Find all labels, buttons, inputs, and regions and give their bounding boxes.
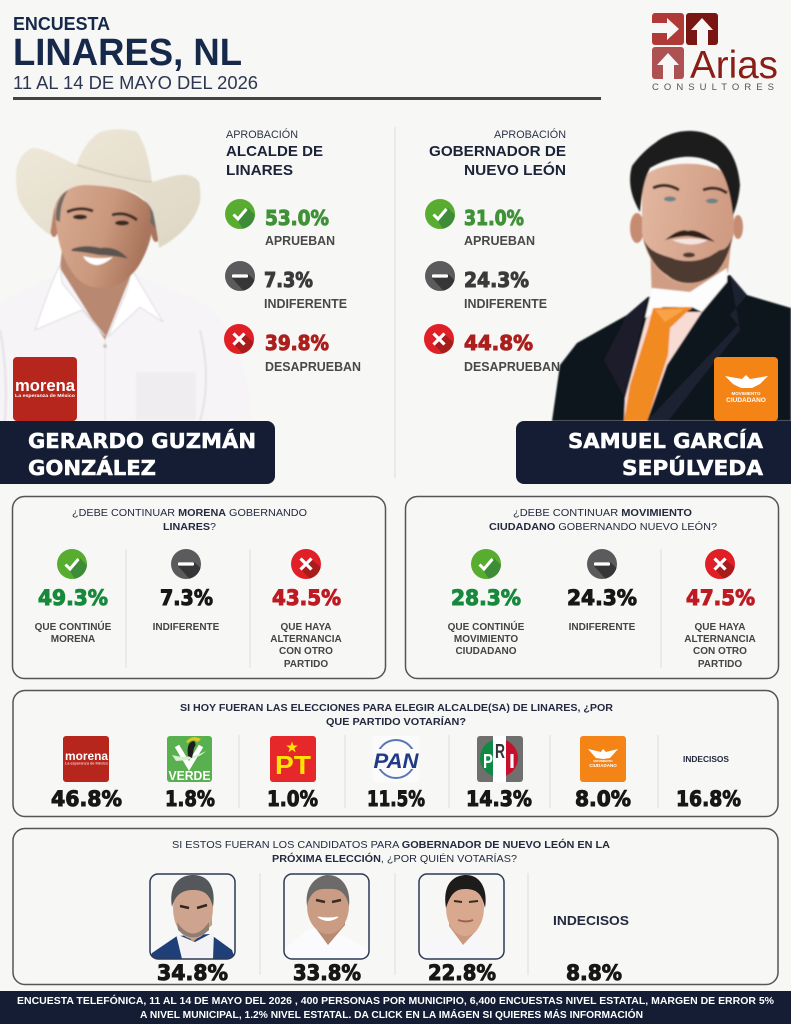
party: Verde [165,736,215,811]
panel: continuar Movimiento Ciudadano: ¿DEBE CONTINUAR MOVIMIENTO [513,507,692,519]
panel: continuar Morena: QUE HAYA [281,622,331,633]
panel: continuar Movimiento Ciudadano: 24.3% [567,586,637,610]
panel: continuar Morena: 7.3% [160,586,213,610]
party: morena: morena [65,749,108,763]
panel: continuar Movimiento Ciudadano: ALTERNANCIA [684,634,756,645]
party: PRI [466,736,532,811]
party: PRI: I [509,751,515,773]
candidate 3 [419,874,504,985]
party: PT [267,736,318,811]
panel: continuar Movimiento Ciudadano: CIUDADANO [455,646,517,657]
panel: continuar Movimiento Ciudadano: CON OTRO [693,646,747,657]
candidate 2: 33.8% [293,961,361,985]
panel: continuar Morena: MORENA [51,634,95,645]
logo: Movimiento Ciudadano: MOVIMIENTO [732,391,761,396]
panel: continuar Morena: 43.5% [272,586,341,610]
panel: continuar Movimiento Ciudadano: PARTIDO [698,659,742,670]
approval: gobernador de Nuevo León [424,128,566,374]
panel: candidatos gobernador: PRÓXIMA ELECCIÓN , ¿POR QUIÉN VOTARÍAS? [272,852,517,865]
panel: continuar Movimiento Ciudadano: MOVIMIENTO [454,634,518,645]
party: morena: 46.8% [51,787,122,811]
indecisos: INDECISOS [553,913,629,928]
panel: continuar Morena: 49.3% [38,586,108,610]
logo: morena: La esperanza de México [15,393,75,398]
candidate 2 [284,874,369,985]
panel: candidatos gobernador: SI ESTOS FUERAN LOS CANDIDATOS PARA GOBERNADOR DE NUEVO LEÓN EN LA [172,838,610,851]
panel: continuar Movimiento Ciudadano: QUE CONTINÚE [448,620,525,633]
indecisos: 8.8% [566,961,622,985]
panel: continuar Morena: ALTERNANCIA [270,634,342,645]
party: Movimiento Ciudadano [575,736,631,811]
party: PRI: R [495,741,505,763]
approval: alcalde de Linares: 53.0% [265,206,329,230]
approval: gobernador de Nuevo León: 31.0% [464,206,524,230]
portrait: Gerardo Guzmán González [0,129,251,421]
name bar: Gerardo: GERARDO GUZMÁN [28,429,256,453]
approval: gobernador de Nuevo León: NUEVO LEÓN [464,161,566,179]
approval: alcalde de Linares: APROBACIÓN [226,128,298,141]
title block: ENCUESTA [13,14,110,34]
candidate 1 [150,874,235,985]
party: PAN [367,736,425,811]
name bar: Samuel: SEPÚLVEDA [622,456,764,480]
logo: Movimiento Ciudadano: CIUDADANO [726,397,766,404]
approval: alcalde de Linares: 39.8% [265,331,329,355]
panel: continuar Morena: QUE CONTINÚE [35,620,112,633]
name bar: Gerardo: GONZÁLEZ [28,456,156,480]
logo: morena [13,357,77,421]
party: Movimiento Ciudadano: 8.0% [575,787,631,811]
panel: continuar Movimiento Ciudadano: INDIFERENTE [569,622,636,633]
approval: alcalde de Linares: ALCALDE DE [226,143,323,160]
panel: continuar Morena: CON OTRO [279,646,333,657]
candidate 1: 34.8% [157,961,228,985]
panel: continuar Movimiento Ciudadano [406,496,778,678]
footer note: ENCUESTA TELEFÓNICA, 11 AL 14 DE MAYO DEL 2026 , 400 PERSONAS POR MUNICIPIO, 6,400 ENCUESTAS NIVEL ESTATAL, MARGEN DE ERROR 5% [17,994,774,1007]
name bar: Gerardo [0,421,275,484]
party: PT: 1.0% [267,787,318,811]
approval: gobernador de Nuevo León: INDIFERENTE [464,297,547,311]
approval: gobernador de Nuevo León: APRUEBAN [464,234,535,248]
name bar: Samuel [516,421,791,484]
panel: continuar Morena: ¿DEBE CONTINUAR MORENA GOBERNANDO [72,507,307,519]
indecisos: 16.8% [676,787,741,811]
party: PAN: 11.5% [367,787,425,811]
panel: continuar Morena: PARTIDO [284,659,328,670]
panel: elecciones alcalde: QUE PARTIDO VOTARÍAN? [326,715,466,728]
name bar: Samuel: SAMUEL GARCÍA [568,429,764,453]
indecisos [553,913,629,985]
portrait: Samuel García Sepúlveda [552,131,791,421]
approval: alcalde de Linares: DESAPRUEBAN [265,360,361,374]
party: Movimiento Ciudadano: MOVIMIENTO [593,759,613,763]
panel: continuar Morena: LINARES? [163,521,216,533]
approval: alcalde de Linares: LINARES [226,162,293,179]
panel: continuar Morena: INDIFERENTE [153,622,220,633]
panel: elecciones alcalde: SI HOY FUERAN LAS ELECCIONES PARA ELEGIR ALCALDE(SA) DE LINARES, ¿POR [180,702,613,714]
panel: candidatos gobernador [13,828,778,985]
party: morena [51,736,122,811]
panel: continuar Movimiento Ciudadano: 47.5% [686,586,755,610]
party: PAN: PAN [374,750,419,773]
logo: Arias Consultores: CONSULTORES [652,82,774,93]
title block [13,14,258,93]
party: PRI: 14.3% [466,787,532,811]
approval: gobernador de Nuevo León: GOBERNADOR DE [429,143,566,160]
party: PT: PT [275,750,311,780]
party: Movimiento Ciudadano: CIUDADANO [589,763,617,768]
party: Verde: VERDE [168,768,211,783]
approval: alcalde de Linares: 7.3% [264,268,313,292]
panel: continuar Movimiento Ciudadano: QUE HAYA [695,622,745,633]
panel: elecciones alcalde [13,690,778,816]
indecisos [676,754,741,811]
logo: Arias Consultores: Arias [690,44,778,87]
candidate 3: 22.8% [428,961,496,985]
party: morena: La esperanza de México [65,762,108,766]
approval: alcalde de Linares [224,128,361,374]
logo: Arias Consultores [652,13,778,93]
approval: gobernador de Nuevo León: APROBACIÓN [494,128,566,141]
logo: morena: morena [15,376,76,395]
approval: gobernador de Nuevo León: 44.8% [464,331,533,355]
footer note [0,991,791,1024]
approval: alcalde de Linares: APRUEBAN [265,234,335,248]
indecisos: INDECISOS [683,754,729,764]
title block: LINARES, NL [13,32,242,74]
party: Verde: 1.8% [165,787,215,811]
footer note: A NIVEL MUNICIPAL, 1.2% NIVEL ESTATAL. DA CLICK EN LA IMÁGEN SI QUIERES MÁS INFORMACIÓN [140,1008,643,1021]
panel: continuar Movimiento Ciudadano: 28.3% [451,586,521,610]
panel: continuar Morena [12,496,386,678]
approval: alcalde de Linares: INDIFERENTE [264,297,347,311]
panel: continuar Movimiento Ciudadano: CIUDADANO GOBERNANDO NUEVO LEÓN? [489,520,717,533]
party: PRI: P [483,751,493,773]
title block: 11 AL 14 DE MAYO DEL 2026 [13,73,258,93]
approval: gobernador de Nuevo León: 24.3% [464,268,529,292]
approval: gobernador de Nuevo León: DESAPRUEBAN [464,360,560,374]
logo: Movimiento Ciudadano [714,357,778,421]
